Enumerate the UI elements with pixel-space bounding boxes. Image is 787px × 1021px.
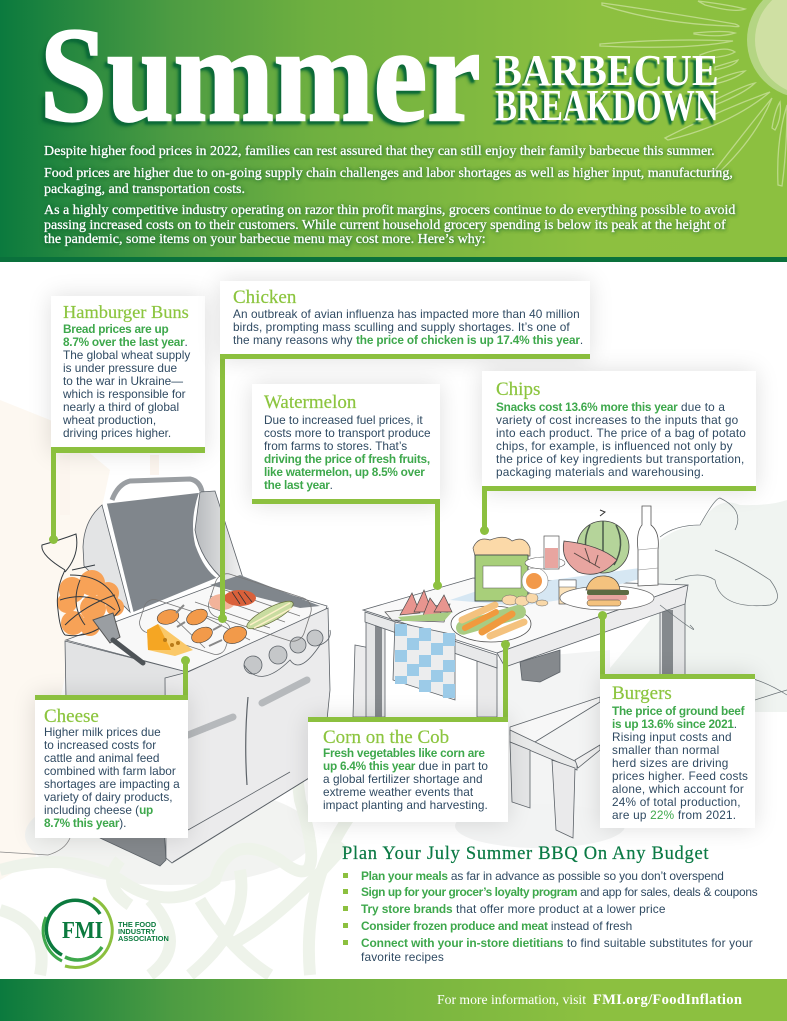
body text: driving prices higher. (63, 426, 171, 440)
body text: birds, prompting mass sculling and supply shortages. It’s one of (233, 320, 570, 334)
intro paragraph 3: passing increased costs on to their customers. While current household grocery spending is below its peak at the height of (44, 218, 726, 233)
icon: burger on plate (560, 576, 654, 610)
subtitle: barbecue breakdown: BREAKDOWN (495, 81, 719, 130)
heading: Hamburger Buns (63, 302, 189, 322)
panel: watermelon (252, 384, 440, 504)
icon: sun (599, 0, 787, 187)
heading: Watermelon (264, 392, 356, 413)
body text (264, 413, 431, 492)
heading: Corn on the Cob (323, 727, 449, 748)
logo: FMI (42, 896, 169, 969)
body text: The price of ground beef (612, 704, 744, 718)
green rule (220, 354, 590, 359)
body text: driving the price of fresh fruits, (264, 452, 430, 466)
footer banner (0, 979, 787, 1021)
body text: herd sizes are driving (612, 756, 729, 770)
body text: shortages are impacting a (44, 777, 180, 791)
body text: the price of key ingredients but transportation, (496, 452, 744, 466)
body text: combined with farm labor (44, 764, 176, 778)
green rule (252, 499, 440, 504)
connector: corn (501, 640, 510, 717)
body text: Due to increased fuel prices, it (264, 413, 423, 427)
intro paragraph 3 (44, 202, 738, 248)
tips list: Consider frozen produce and meat instead of fresh (361, 919, 632, 933)
body text (44, 725, 180, 830)
body text: to the war in Ukraine— (63, 374, 183, 388)
body text: is up 13.6% since 2021. (612, 717, 737, 731)
body text: costs more to transport produce (264, 426, 431, 440)
body text: like watermelon, up 8.5% over (264, 465, 425, 479)
body text: variety of cost increases to the inputs that go (496, 413, 738, 427)
body text: smaller than normal (612, 743, 719, 757)
body text (323, 746, 488, 812)
body text (63, 322, 190, 440)
tips list (343, 869, 758, 964)
logo: FMI: THE FOOD (118, 920, 157, 929)
body text: wheat production, (63, 413, 156, 427)
body text: chips, for example, is influenced not only by (496, 439, 733, 453)
body text: up 6.4% this year due in part to (323, 759, 488, 773)
body text: packaging materials and warehousing. (496, 465, 704, 479)
panel: burgers (600, 674, 755, 828)
intro paragraph 2: Food prices are higher due to on-going supply chain challenges and labor shortages as well as higher input, manufacturing, (44, 166, 733, 181)
connector: chips (480, 491, 489, 535)
heading: Chips (496, 379, 540, 400)
body text: extreme weather events that (323, 785, 473, 799)
illustration: grill and table scene (0, 400, 787, 979)
icon: bag of hamburger buns (42, 534, 143, 663)
icon: orange slice plate and glasses (522, 536, 576, 604)
tips list: Sign up for your grocer’s loyalty program and app for sales, deals & coupons (361, 885, 757, 899)
intro paragraph 3: As a highly competitive industry operating on razor thin profit margins, grocers continue to do everything possible to avoid (44, 203, 735, 218)
body text (496, 400, 746, 479)
body text: Higher milk prices due (44, 725, 161, 739)
logo: FMI: FMI (62, 918, 103, 944)
body text: which is responsible for (63, 387, 186, 401)
body text: The global wheat supply (63, 348, 190, 362)
heading: Chicken (233, 287, 296, 308)
icon: bottle (638, 506, 658, 586)
icon: whole watermelon and slice (563, 510, 629, 574)
connector: cheese (181, 656, 190, 695)
body text: Bread prices are up (63, 322, 168, 336)
body text: from farms to stores. That’s (264, 439, 407, 453)
body text: 8.7% over the last year. (63, 335, 188, 349)
subtitle: barbecue breakdown (492, 46, 719, 130)
green rule (35, 695, 188, 700)
body text: Fresh vegetables like corn are (323, 746, 485, 760)
heading: Burgers (612, 683, 672, 704)
body text: cattle and animal feed (44, 751, 159, 765)
panel: cheese (35, 695, 188, 838)
tips list: Connect with your in-store dietitians to find suitable substitutes for your (361, 936, 753, 950)
body text: into each product. The price of a bag of potato (496, 426, 746, 440)
body text (612, 704, 748, 822)
body text: a global fertilizer shortage and (323, 772, 483, 786)
green rule (308, 717, 508, 722)
connector: chicken (218, 359, 227, 623)
footer text: For more information, visit FMI.org/FoodInflation (437, 992, 742, 1008)
body text: prices higher. Feed costs (612, 769, 748, 783)
tips list: Plan your meals as far in advance as possible so you don’t overspend (361, 869, 724, 883)
green rule (600, 674, 755, 679)
header banner (0, 0, 787, 262)
heading: plan your BBQ: Plan Your July Summer BBQ On Any Budget (342, 844, 709, 864)
subtitle: barbecue breakdown: BARBECUE (495, 46, 719, 95)
body text: the many reasons why the price of chicken is up 17.4% this year. (233, 333, 583, 347)
decorative line (660, 498, 787, 700)
body text: are up 22% from 2021. (612, 808, 736, 822)
body text: Snacks cost 13.6% more this year due to a (496, 400, 725, 414)
logo: FMI: ASSOCIATION (118, 934, 169, 943)
body text: impact planting and harvesting. (323, 798, 488, 812)
connector: buns (49, 453, 58, 544)
intro paragraph 3: the pandemic, some items on your barbecue menu may cost more. Here’s why: (44, 232, 486, 247)
body text: including cheese (up (44, 803, 153, 817)
body text: 8.7% this year). (44, 816, 126, 830)
icon: corn on a plate (451, 605, 531, 642)
body text: the last year. (264, 478, 333, 492)
icon: watermelon wedges (385, 590, 452, 622)
panel: chips (482, 371, 756, 491)
intro paragraph 2 (44, 165, 735, 198)
intro paragraph 2: packaging, and transportation costs. (44, 182, 245, 197)
panel: hamburger buns (51, 296, 205, 453)
title: Summer: Summer (40, 1, 480, 150)
tips list: Try store brands that offer more product at a lower price (361, 902, 666, 916)
body text: variety of dairy products, (44, 790, 173, 804)
tips list: favorite recipes (361, 950, 444, 964)
body text: alone, which account for (612, 782, 744, 796)
icon: grilled food on grate (147, 590, 296, 656)
body text: is under pressure due (63, 361, 177, 375)
background: pale shapes (0, 400, 787, 975)
panel: corn on the cob (308, 717, 508, 822)
intro paragraph 1: Despite higher food prices in 2022, families can rest assured that they can still enjoy their family barbecue this summer. (44, 144, 715, 159)
green rule (51, 447, 205, 453)
connector: burgers (598, 611, 607, 674)
icon: grill (0, 479, 330, 866)
connector: watermelon (433, 504, 442, 590)
panel: chicken (220, 281, 590, 359)
body text: to increased costs for (44, 738, 156, 752)
body text: nearly a third of global (63, 400, 179, 414)
logo: FMI: INDUSTRY (118, 927, 156, 936)
body text: 24% of total production, (612, 795, 741, 809)
heading: Cheese (44, 706, 99, 727)
icon: picnic table (353, 568, 688, 838)
icon: chips bag (473, 537, 548, 606)
body text: Rising input costs and (612, 730, 732, 744)
green rule (482, 486, 756, 491)
body text: An outbreak of avian influenza has impacted more than 40 million (233, 307, 580, 321)
body text (233, 307, 583, 347)
